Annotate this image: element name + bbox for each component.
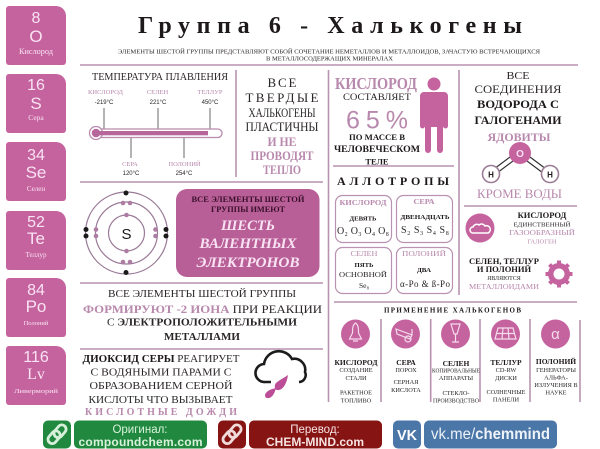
application: oxygen: КИСЛОРОД <box>334 358 378 367</box>
text: hydrogen halides: ГАЛОГЕНАМИ <box>474 113 562 127</box>
text: except water: КРОМЕ ВОДЫ <box>477 186 562 201</box>
text: solid chalcogens <box>246 75 319 177</box>
text: form -2 ions: МЕТАЛЛАМИ <box>164 331 240 343</box>
text: solid chalcogens: И НЕ <box>268 134 296 149</box>
text: acid rain: КИСЛОТЫ ЧТО ВЫЗЫВАЕТ <box>88 394 233 406</box>
allotrope card: selenium: ПЯТЬ <box>354 262 374 269</box>
element tile: selenium: Se <box>26 163 46 182</box>
element tile: tellurium: 52 <box>27 214 45 231</box>
application: selenium: ПРОИЗВОДСТВО <box>433 398 479 404</box>
oxygen in human body: 65% <box>346 106 408 134</box>
element tile: livermorium: Lv <box>27 366 45 383</box>
text: oxygen halogen: ГАЛОГЕН <box>527 238 557 246</box>
element tile: tellurium: Te <box>27 229 45 248</box>
text: metalloids: СЕЛЕН, ТЕЛЛУР <box>469 256 539 266</box>
element tile: polonium: Полоний <box>24 320 49 327</box>
oxygen in human body: ПО МАССЕ В <box>349 132 405 142</box>
allotrope card: oxygen <box>336 196 392 242</box>
application: polonium: α <box>551 326 560 343</box>
element tile: polonium <box>6 278 66 337</box>
button: original source: Оригинал: <box>112 424 168 436</box>
application: oxygen: ТОПЛИВО <box>341 398 372 404</box>
text: form -2 ions: ВСЕ ЭЛЕМЕНТЫ ШЕСТОЙ ГРУППЫ <box>108 288 296 300</box>
allotrope card: selenium: Se₈ <box>359 281 369 290</box>
element tile: sulfur <box>6 74 66 133</box>
oxygen in human body: СОСТАВЛЯЕТ <box>343 93 411 103</box>
title: Группа 6 - Халькогены <box>138 13 522 39</box>
allotrope card: sulfur: ДВЕНАДЦАТЬ <box>400 214 450 221</box>
melting point chart: ПОЛОНИЙ <box>168 160 201 168</box>
text: metalloids: И ПОЛОНИЙ <box>477 264 532 274</box>
application: selenium: КОПИРОВАЛЬНЫЕ <box>432 368 480 374</box>
melting point chart: -219°C <box>95 100 114 106</box>
intro text: В МЕТАЛЛОСОДЕРЖАЩИХ МИНЕРАЛАХ <box>266 56 394 62</box>
element tile: oxygen: Кислород <box>19 47 53 56</box>
application: selenium <box>432 320 480 404</box>
text: oxygen halogen: ЕДИНСТВЕННЫЙ <box>514 220 571 228</box>
allotropes heading: АЛЛОТРОПЫ <box>337 174 449 188</box>
icon: acid rain cloud <box>255 351 306 398</box>
melting point chart: КИСЛОРОД <box>88 89 124 96</box>
melting point chart: 450°C <box>202 100 219 106</box>
application: sulfur: СЕРНАЯ <box>394 379 419 386</box>
text: form -2 ions <box>83 288 322 343</box>
text: metalloids: МЕТАЛЛОИДАМИ <box>469 283 539 291</box>
panel: six valence electrons <box>176 189 320 277</box>
element tile: polonium: 84 <box>27 282 45 299</box>
text: metalloids <box>469 256 539 291</box>
application: tellurium: ПАНЕЛИ <box>493 396 520 404</box>
allotrope card: polonium <box>396 248 452 294</box>
oxygen in human body: ТЕЛЕ <box>365 156 389 166</box>
panel: six valence electrons: ШЕСТЬ <box>220 218 275 234</box>
element tile: polonium: Po <box>26 297 46 316</box>
melting point chart <box>88 72 228 177</box>
panel: six valence electrons: ЭЛЕКТРОНОВ <box>196 255 300 271</box>
application: polonium: АЛЬФА- <box>544 374 568 382</box>
intro text: ЭЛЕМЕНТЫ ШЕСТОЙ ГРУППЫ ПРЕДСТАВЛЯЮТ СОБОЙ СОЧЕТАНИЕ НЕМЕТАЛЛОВ И МЕТАЛЛОИДОВ, ЗАЧАСТУЮ ВСТРЕЧАЮЩИХСЯ <box>118 48 540 56</box>
sulfur atom diagram <box>84 190 168 275</box>
icon: gas cloud <box>466 214 494 242</box>
text: oxygen halogen: ГАЗООБРАЗНЫЙ <box>509 229 575 237</box>
application: polonium: НАУКЕ <box>545 390 567 396</box>
element tile: oxygen <box>6 6 66 65</box>
text: form -2 ions: ФОРМИРУЮТ -2 ИОНА ПРИ РЕАКЦИИ <box>83 304 322 316</box>
application: selenium: АППАРАТЫ <box>439 375 474 382</box>
melting point chart: 221°C <box>150 100 167 106</box>
melting point chart: 120°C <box>123 171 140 177</box>
text: oxygen halogen <box>509 210 575 246</box>
allotrope card: oxygen: КИСЛОРОД <box>340 198 387 207</box>
icon: water molecule <box>482 142 558 182</box>
text: hydrogen halides: ВСЕ <box>506 70 530 82</box>
text: solid chalcogens: ТВЕРДЫЕ <box>246 90 319 105</box>
application: oxygen: СОЗДАНИЕ <box>339 367 373 374</box>
text: hydrogen halides: СОЕДИНЕНИЯ <box>474 82 562 96</box>
element tile: tellurium: Теллур <box>25 251 47 259</box>
element tile: livermorium: 116 <box>23 349 49 366</box>
icon: person <box>420 78 448 153</box>
allotrope card: selenium: ОСНОВНОЙ <box>339 270 388 279</box>
icon: gear <box>546 260 572 288</box>
application: sulfur: ПОРОХ <box>395 367 417 374</box>
application: polonium: ПОЛОНИЙ <box>536 357 576 366</box>
button: translation: Перевод: <box>290 424 340 436</box>
panel: six valence electrons: ВСЕ ЭЛЕМЕНТЫ ШЕСТОЙ <box>192 194 305 204</box>
text: acid rain: ДИОКСИД СЕРЫ РЕАГИРУЕТ <box>82 353 240 365</box>
text: solid chalcogens: ПРОВОДЯТ <box>250 148 314 163</box>
panel: six valence electrons: ВАЛЕНТНЫХ <box>198 236 297 252</box>
icon: water molecule: H <box>488 170 494 180</box>
application: tellurium: CD-RW <box>496 367 516 374</box>
application: tellurium <box>486 320 526 404</box>
application: sulfur: СЕРА <box>396 358 416 367</box>
allotrope card: selenium <box>336 248 392 294</box>
application: sulfur <box>391 320 421 394</box>
text: oxygen halogen: КИСЛОРОД <box>518 210 567 220</box>
element tile: livermorium: Ливерморий <box>14 388 59 395</box>
application: tellurium: СОЛНЕЧНЫЕ <box>486 389 526 396</box>
oxygen in human body <box>334 74 448 166</box>
melting point chart: ТЕЛЛУР <box>198 89 223 96</box>
allotrope card: sulfur <box>396 196 452 242</box>
text: metalloids: ЯВЛЯЮТСЯ <box>487 276 521 282</box>
application: oxygen: СТАЛИ <box>345 375 367 382</box>
panel: six valence electrons: ГРУППЫ ИМЕЮТ <box>211 204 285 214</box>
element tile: selenium <box>6 142 66 201</box>
melting point chart: 254°C <box>176 171 193 177</box>
text: hydrogen halides: ЯДОВИТЫ <box>488 130 551 144</box>
allotrope card: polonium: α-Po & ß-Po <box>400 279 450 289</box>
application: oxygen: РАКЕТНОЕ <box>340 390 372 396</box>
element tile: selenium: Селен <box>27 185 45 193</box>
element tile: tellurium <box>6 211 66 270</box>
text: solid chalcogens: ВСЕ <box>268 75 297 90</box>
button: translation: CHEM-MIND.com <box>266 435 364 449</box>
text: solid chalcogens: ТЕПЛО <box>263 162 301 177</box>
oxygen in human body: ЧЕЛОВЕЧЕСКОМ <box>334 144 421 154</box>
allotrope card: selenium: СЕЛЕН <box>350 249 378 258</box>
application: polonium <box>534 320 578 396</box>
applications heading: ПРИМЕНЕНИЕ ХАЛЬКОГЕНОВ <box>384 306 521 314</box>
button: vk <box>393 420 557 448</box>
text: solid chalcogens: ХАЛЬКОГЕНЫ <box>248 105 316 120</box>
icon: water molecule: H <box>547 170 553 180</box>
text: acid rain: ОБРАЗОВАНИЕМ СЕРНОЙ <box>90 380 233 392</box>
application: tellurium: ТЕЛЛУР <box>490 358 522 367</box>
text: hydrogen halides: ВОДОРОДА С <box>477 97 559 111</box>
intro text <box>118 48 540 62</box>
element tile: sulfur: Сера <box>28 113 44 122</box>
application: sulfur: КИСЛОТА <box>391 387 421 394</box>
melting point chart: ТЕМПЕРАТУРА ПЛАВЛЕНИЯ <box>92 72 228 83</box>
element tile: selenium: 34 <box>27 147 45 164</box>
text: acid rain <box>82 353 240 418</box>
text: form -2 ions: С ЭЛЕКТРОПОЛОЖИТЕЛЬНЫМИ <box>107 316 297 328</box>
application: tellurium: ДИСКИ <box>495 375 517 382</box>
oxygen in human body: КИСЛОРОД <box>335 74 417 93</box>
element tile: oxygen: O <box>29 27 43 46</box>
button: vk: vk.me/chemmind <box>431 426 550 443</box>
application: polonium: ИЗЛУЧЕНИЯ В <box>534 382 578 389</box>
icon: water molecule: O <box>516 149 524 160</box>
element tile: oxygen: 8 <box>32 10 41 27</box>
allotrope card: polonium: ПОЛОНИЙ <box>402 249 447 258</box>
application: polonium: ГЕНЕРАТОРЫ <box>536 367 576 374</box>
allotrope card: sulfur: СЕРА <box>414 198 434 206</box>
allotrope card: oxygen: ДЕВЯТЬ <box>350 216 376 222</box>
application: selenium: СЕЛЕН <box>443 359 470 368</box>
sulfur atom diagram: S <box>121 226 132 243</box>
melting point chart: СЕРА <box>122 161 138 168</box>
allotrope card: polonium: ДВА <box>417 267 431 274</box>
melting point chart: СЕЛЕН <box>147 89 168 96</box>
text: acid rain: КИСЛОТНЫЕ ДОЖДИ <box>85 407 237 418</box>
button: original source: compoundchem.com <box>78 435 202 449</box>
button: translation <box>218 420 382 449</box>
text: acid rain: С ВОДЯНЫМИ ПАРАМИ С <box>90 366 232 378</box>
button: original source <box>43 420 207 449</box>
element tile: livermorium <box>6 346 66 405</box>
element tile: sulfur: 16 <box>27 77 45 94</box>
application: selenium: СТЕКЛО- <box>442 390 470 397</box>
text: solid chalcogens: ПЛАСТИЧНЫ <box>246 119 318 134</box>
button: vk: VK <box>397 427 417 444</box>
allotrope card: oxygen: O₂ O₃ O₄ O₈ <box>337 226 390 237</box>
allotrope card: sulfur: S₂ S₃ S₄ S₈ <box>401 225 450 236</box>
text: hydrogen halides <box>474 70 562 144</box>
application: oxygen <box>334 320 378 404</box>
element tile: sulfur: S <box>30 94 42 113</box>
